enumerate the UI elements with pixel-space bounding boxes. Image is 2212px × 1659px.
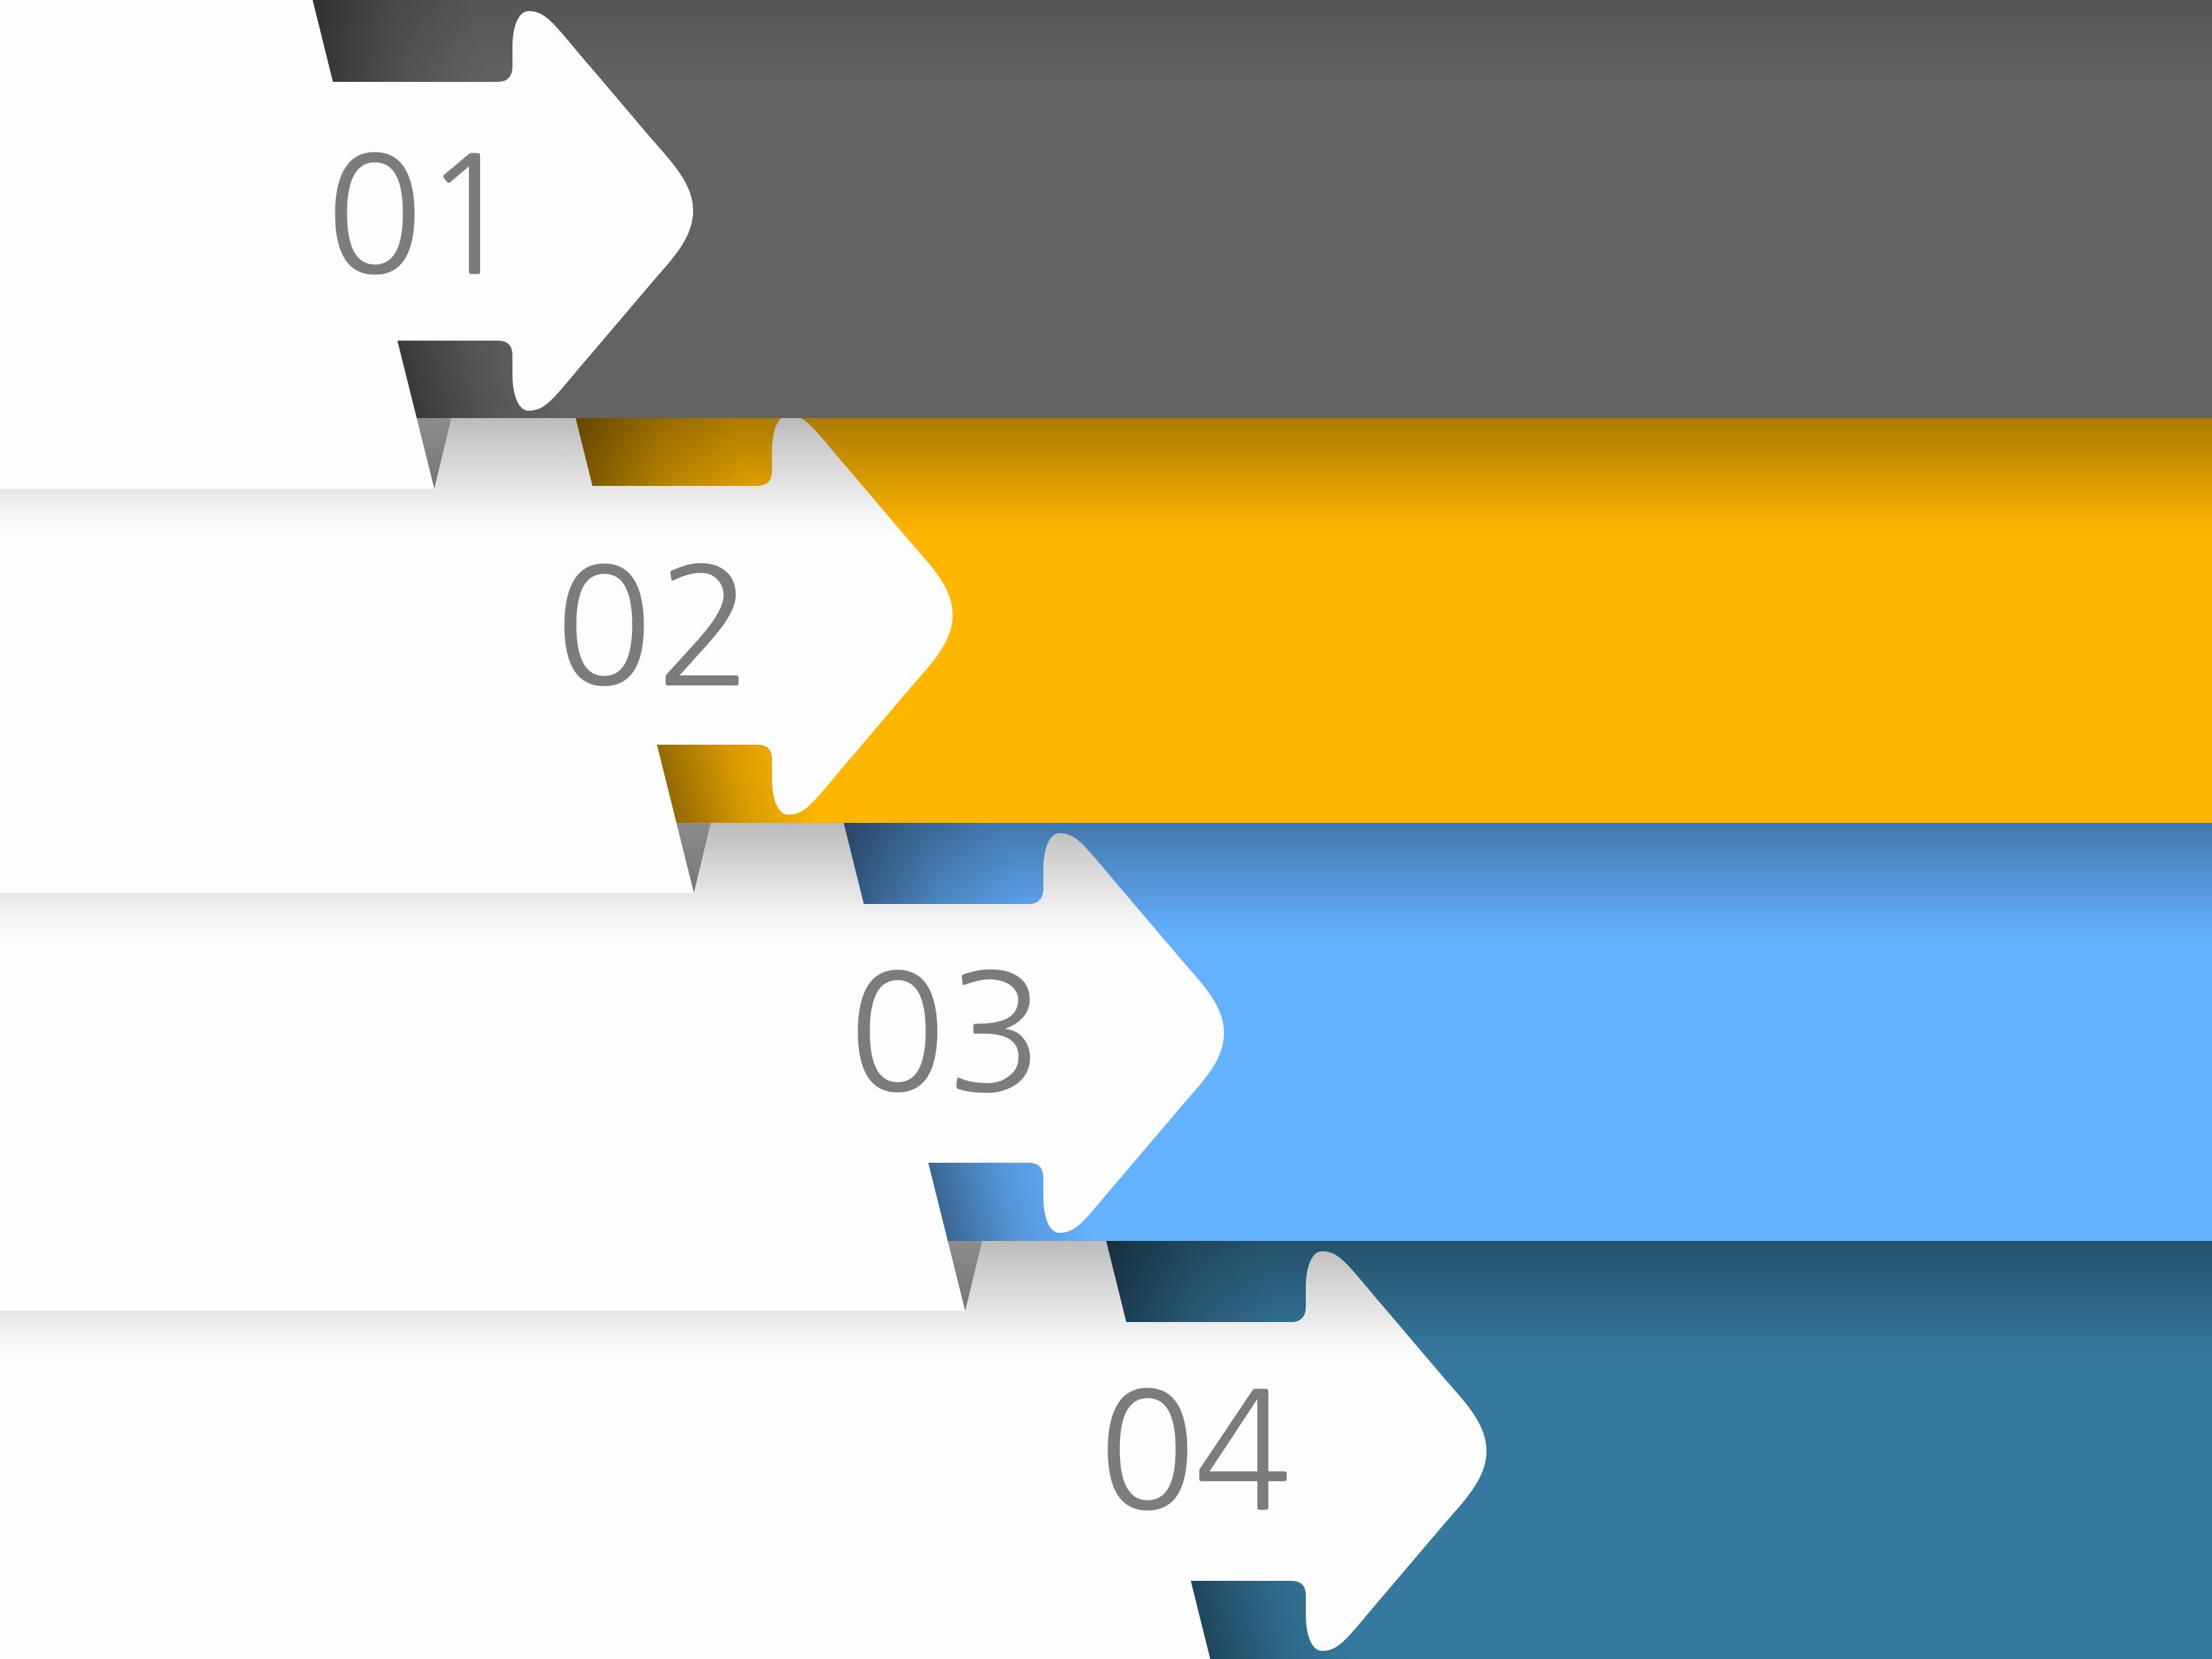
notch shading: step 02 <box>481 389 820 823</box>
number: 04: 04 <box>1098 1371 1292 1533</box>
notch shading: step 04 <box>1015 1225 1354 1659</box>
arrow: step 02 white <box>0 404 953 893</box>
panel: step 01 gray band and arrow <box>0 0 2212 489</box>
band shadow: step 03 <box>0 823 2212 945</box>
number: 03: 03 <box>848 953 1044 1115</box>
top shadow: step 01 <box>0 0 2212 81</box>
colour shadow: step 03 <box>0 823 2212 945</box>
arrow: step 03 white <box>0 822 1224 1311</box>
fold shadow: under step 03 tip <box>947 1241 982 1311</box>
colour shadow: step 04 <box>0 1241 2212 1363</box>
notch shading: step 01 <box>221 0 560 418</box>
panel: step 02 amber band and arrow <box>0 389 2212 893</box>
band: teal <box>0 1241 2212 1659</box>
fold shadow: under step 01 tip <box>417 418 451 489</box>
band: amber <box>0 418 2212 823</box>
number: 02: 02 <box>554 546 754 709</box>
number: 01: 01 <box>325 135 518 297</box>
panel: step 04 teal band and arrow <box>0 1225 2212 1659</box>
arrow: step 01 white <box>0 0 693 489</box>
notch shading: step 03 <box>752 807 1091 1241</box>
arrow: step 04 white <box>0 1240 1486 1659</box>
band: gray <box>0 0 2212 418</box>
fold shadow: under step 02 tip <box>676 823 711 893</box>
band: blue <box>0 823 2212 1241</box>
band shadow: step 04 <box>0 1241 2212 1363</box>
band shadow: step 02 <box>0 418 2212 540</box>
colour shadow: step 02 <box>0 418 2212 540</box>
panel: step 03 blue band and arrow <box>0 807 2212 1311</box>
